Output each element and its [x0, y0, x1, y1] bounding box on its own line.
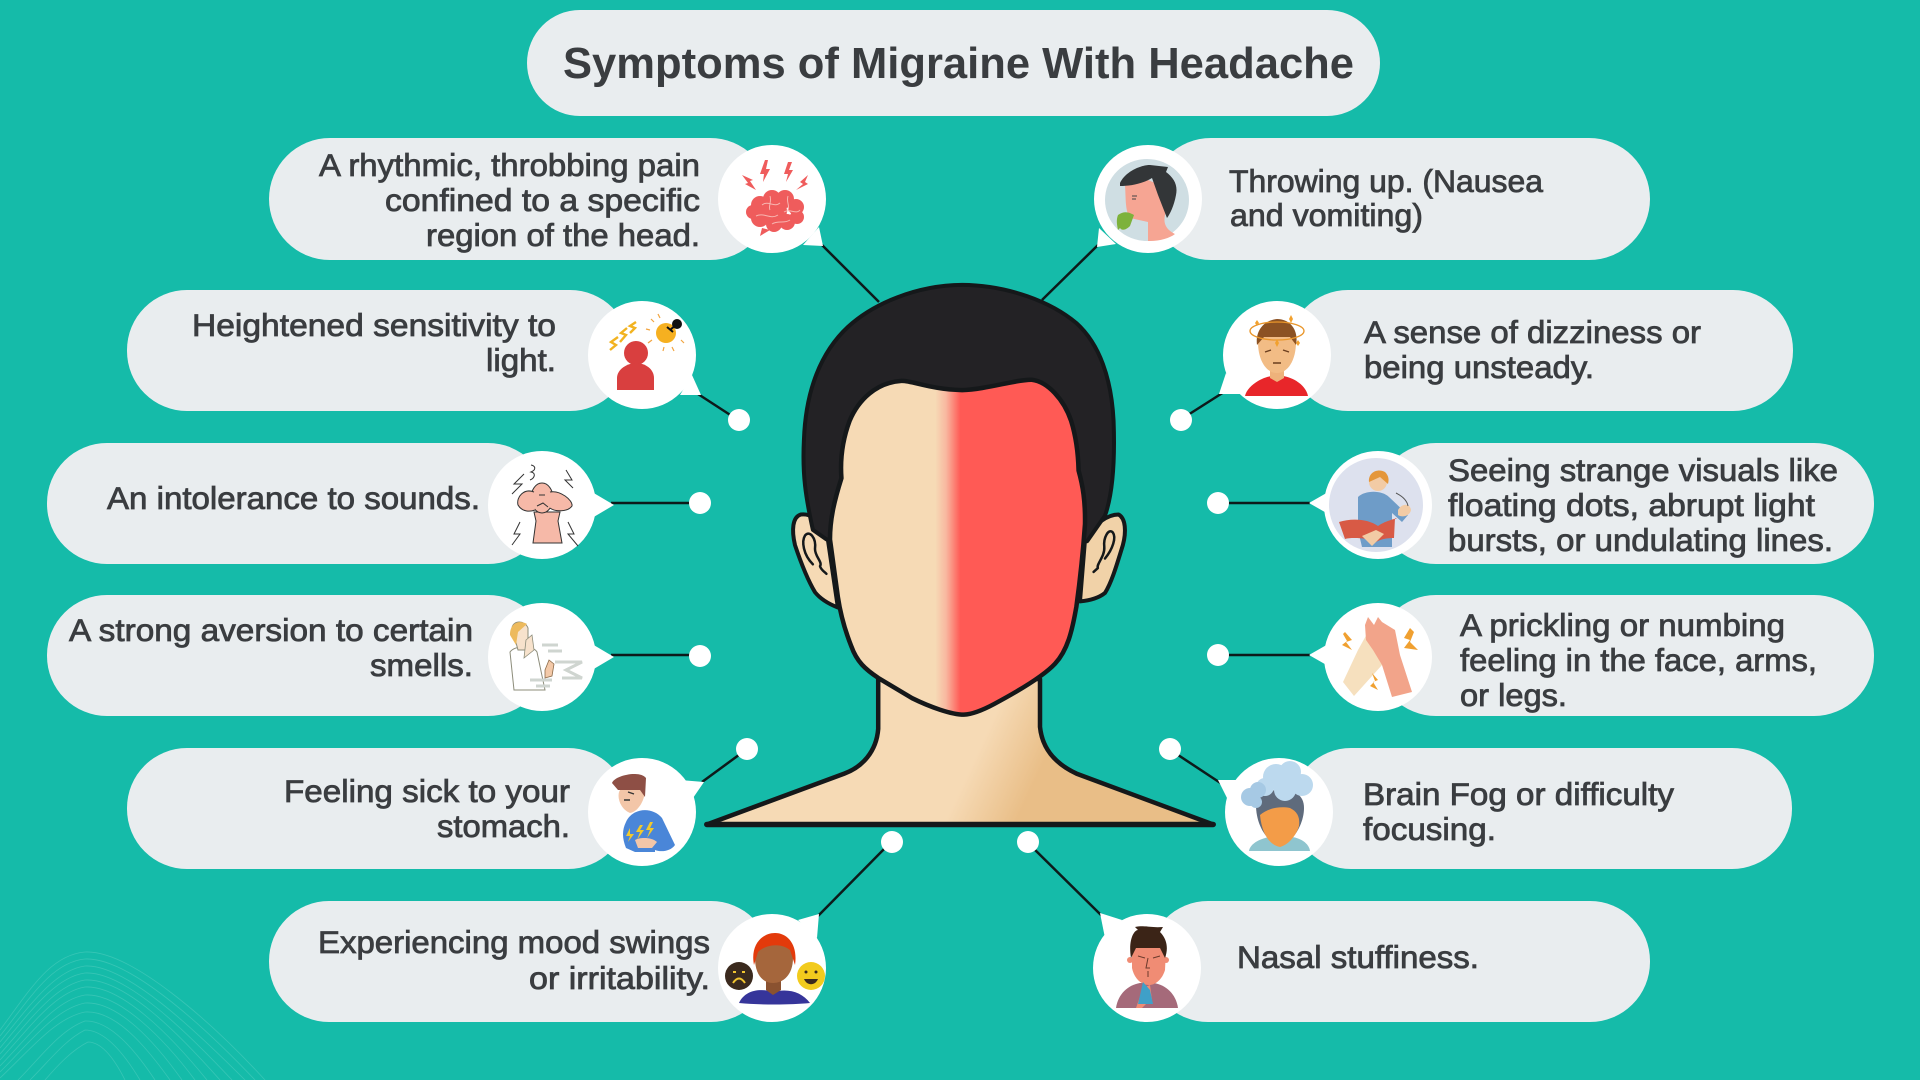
- panel: strange visuals: [1309, 443, 1874, 564]
- panel: aversion to smells: [47, 595, 614, 716]
- panel: sensitivity to light: Heightened sensitivity to: [192, 307, 556, 343]
- panel: sick to stomach: stomach.: [437, 808, 570, 844]
- panel: throwing up: and vomiting): [1230, 197, 1423, 233]
- panel: aversion to smells: smells.: [370, 647, 473, 683]
- panel: intolerance to sounds: [47, 443, 614, 564]
- icon: person vomiting: [1105, 159, 1189, 241]
- icon: person and light bulb: [610, 314, 684, 390]
- icon: person holding nose: [510, 622, 582, 690]
- panel: brain fog: Brain Fog or difficulty: [1363, 776, 1674, 812]
- title: [527, 10, 1380, 116]
- panel: prickling or numbing: [1309, 595, 1874, 716]
- panel: strange visuals: bursts, or undulating lines.: [1448, 522, 1833, 558]
- panel: sensitivity to light: [127, 290, 701, 411]
- connector lines and dots: [611, 245, 1310, 916]
- panel: aversion to smells: A strong aversion to certain: [69, 612, 473, 648]
- panel: prickling or numbing: or legs.: [1460, 677, 1567, 713]
- panel: mood swings: or irritability.: [529, 960, 710, 996]
- panel: mood swings: Experiencing mood swings: [318, 924, 710, 960]
- panel: strange visuals: floating dots, abrupt light: [1448, 487, 1815, 523]
- panel: brain fog: focusing.: [1363, 811, 1496, 847]
- icon: tingling hands: [1342, 617, 1418, 697]
- panel: dizziness: A sense of dizziness or: [1364, 314, 1701, 350]
- central head illustration: [707, 285, 1213, 824]
- panel: throwing up: [1094, 138, 1650, 260]
- panel: rhythmic throbbing pain: confined to a specific: [385, 182, 700, 218]
- icon: brain with lightning: [742, 160, 808, 236]
- panel: rhythmic throbbing pain: region of the head.: [426, 217, 700, 253]
- panel: nasal stuffiness: Nasal stuffiness.: [1237, 939, 1479, 975]
- icon: fog around head: [1241, 761, 1313, 851]
- icon: woman with emoji faces: [725, 933, 825, 1004]
- panel: mood swings: [269, 901, 826, 1022]
- title: Symptoms of Migraine With Headache: [563, 39, 1354, 88]
- panel: rhythmic throbbing pain: [269, 138, 826, 260]
- icon: dizzy boy: [1245, 315, 1308, 396]
- panel: nasal stuffiness: [1093, 901, 1650, 1022]
- icon: person covering ears: [512, 465, 578, 546]
- panel: throwing up: Throwing up. (Nausea: [1229, 163, 1543, 199]
- panel: sensitivity to light: light.: [486, 342, 556, 378]
- panel: sick to stomach: Feeling sick to your: [284, 773, 570, 809]
- icon: man with tissue: [1116, 926, 1178, 1008]
- icon: man reading a book: [1329, 458, 1423, 552]
- panel: strange visuals: Seeing strange visuals like: [1448, 452, 1838, 488]
- panel: intolerance to sounds: An intolerance to sounds.: [107, 480, 480, 516]
- panel: dizziness: [1219, 290, 1793, 411]
- panel: prickling or numbing: A prickling or numbing: [1460, 607, 1785, 643]
- icon: boy holding stomach: [612, 774, 675, 852]
- panel: prickling or numbing: feeling in the face, arms,: [1460, 642, 1817, 678]
- panel: sick to stomach: [127, 748, 704, 869]
- panel: rhythmic throbbing pain: A rhythmic, throbbing pain: [319, 147, 700, 183]
- panel: brain fog: [1218, 748, 1792, 869]
- panel: dizziness: being unsteady.: [1364, 349, 1594, 385]
